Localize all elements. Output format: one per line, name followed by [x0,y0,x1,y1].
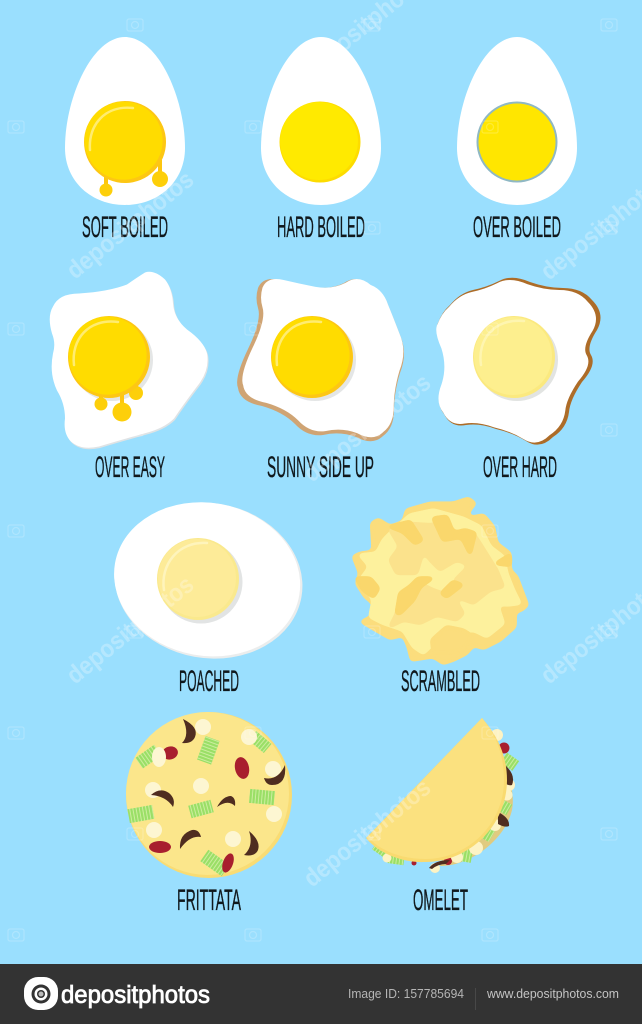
omelet [366,718,519,873]
infographic: egg styles: FRITTATA [177,884,241,917]
over hard egg [436,278,601,445]
infographic: egg styles: SCRAMBLED [401,665,480,698]
infographic: egg styles: OMELET [413,884,468,917]
website: www.depositphotos.com [486,987,619,1001]
infographic: egg styles: SOFT BOILED [82,211,168,244]
scrambled eggs [353,498,527,663]
soft boiled egg [65,37,185,205]
watermark: depositphotos [298,368,436,488]
infographic: egg styles: POACHED [179,665,239,698]
frittata [126,712,292,878]
footer bar [0,964,642,1024]
watermark: depositphotos [61,165,199,285]
hard boiled egg [261,37,381,205]
sunny side up egg [237,279,404,441]
watermark: depositphotos [298,773,436,893]
image id: Image ID: 157785694 [348,987,464,1001]
brand name: depositphotos [61,981,210,1009]
over easy egg [50,272,209,449]
infographic: egg styles: HARD BOILED [277,211,365,244]
infographic: egg styles: SUNNY SIDE UP [267,451,374,484]
icon: camera logo [24,977,58,1010]
poached egg [102,488,315,673]
over boiled egg [457,37,577,205]
infographic: egg styles: OVER EASY [95,451,165,484]
watermark: depositphotos [61,570,199,690]
